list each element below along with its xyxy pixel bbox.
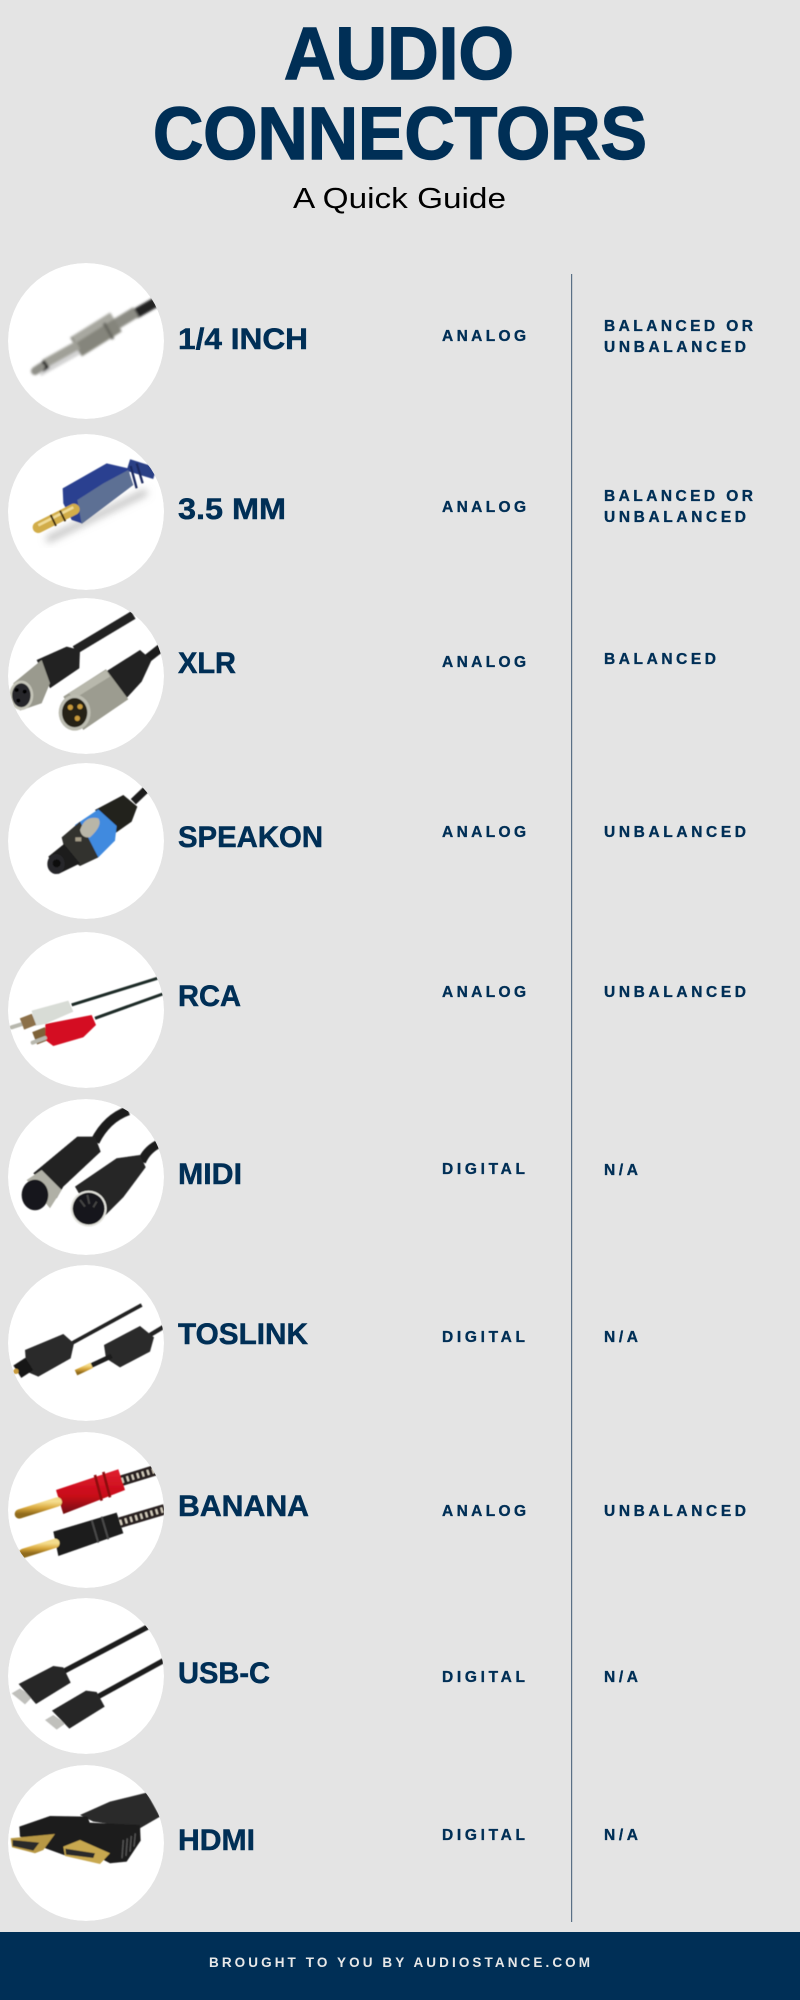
signal type: ANALOG [442, 984, 526, 1001]
icon: Speakon connector [8, 763, 164, 919]
row: HDMI [8, 1765, 638, 1921]
label: USB-C: USB-C [178, 1657, 270, 1690]
title: CONNECTORS [153, 92, 647, 175]
icon: MIDI connectors [8, 1099, 164, 1255]
signal type: ANALOG [442, 328, 526, 345]
signal type: ANALOG [442, 654, 526, 671]
row: RCA [8, 932, 746, 1088]
row: USB-C [8, 1598, 638, 1754]
footer [0, 1932, 800, 2000]
balance type: UNBALANCED [604, 339, 746, 356]
signal type: DIGITAL [442, 1329, 525, 1346]
row: Speakon [8, 763, 746, 919]
row: XLR [8, 598, 716, 754]
icon: 3.5 mm plug [8, 434, 164, 590]
icon: RCA plugs [8, 932, 164, 1088]
row: 3.5 mm [8, 434, 753, 590]
row: 1/4 inch [8, 263, 753, 419]
balance type [604, 488, 753, 526]
signal type: ANALOG [442, 824, 526, 841]
balance type: N/A [604, 1669, 638, 1686]
label: HDMI: HDMI [178, 1824, 255, 1857]
icon: USB-C connectors [8, 1598, 164, 1754]
balance type: UNBALANCED [604, 509, 746, 526]
balance type: N/A [604, 1827, 638, 1844]
subtitle: A Quick Guide [293, 183, 506, 215]
label: XLR: XLR [178, 647, 236, 680]
balance type: N/A [604, 1162, 638, 1179]
signal type: ANALOG [442, 499, 526, 516]
title [153, 12, 647, 175]
balance type: UNBALANCED [604, 824, 746, 841]
icon: XLR connectors [8, 598, 164, 754]
icon: TOSLINK connectors [8, 1265, 164, 1421]
signal type: DIGITAL [442, 1669, 525, 1686]
balance type: BALANCED [604, 651, 716, 668]
balance type: N/A [604, 1329, 638, 1346]
column divider line [571, 274, 572, 1922]
label: Speakon: SPEAKON [178, 821, 323, 854]
footer: BROUGHT TO YOU BY AUDIOSTANCE.COM [209, 1955, 590, 1970]
balance type: BALANCED OR [604, 488, 753, 505]
label: 3.5 mm: 3.5 MM [178, 493, 286, 526]
signal type: DIGITAL [442, 1827, 525, 1844]
balance type: BALANCED OR [604, 318, 753, 335]
row: Banana [8, 1432, 746, 1588]
label: 1/4 inch: 1/4 INCH [178, 323, 308, 356]
row: TOSLINK [8, 1265, 638, 1421]
signal type: ANALOG [442, 1503, 526, 1520]
label: TOSLINK: TOSLINK [178, 1318, 308, 1351]
label: RCA: RCA [178, 980, 241, 1013]
icon: banana plugs [8, 1432, 165, 1588]
icon: 1/4 inch plug [8, 263, 164, 419]
balance type [604, 318, 753, 356]
icon: HDMI connectors [8, 1765, 164, 1921]
signal type: DIGITAL [442, 1161, 525, 1178]
title: AUDIO [284, 12, 514, 95]
row: MIDI [8, 1099, 638, 1255]
label: Banana: BANANA [178, 1490, 309, 1523]
balance type: UNBALANCED [604, 984, 746, 1001]
label: MIDI: MIDI [178, 1158, 242, 1191]
balance type: UNBALANCED [604, 1503, 746, 1520]
